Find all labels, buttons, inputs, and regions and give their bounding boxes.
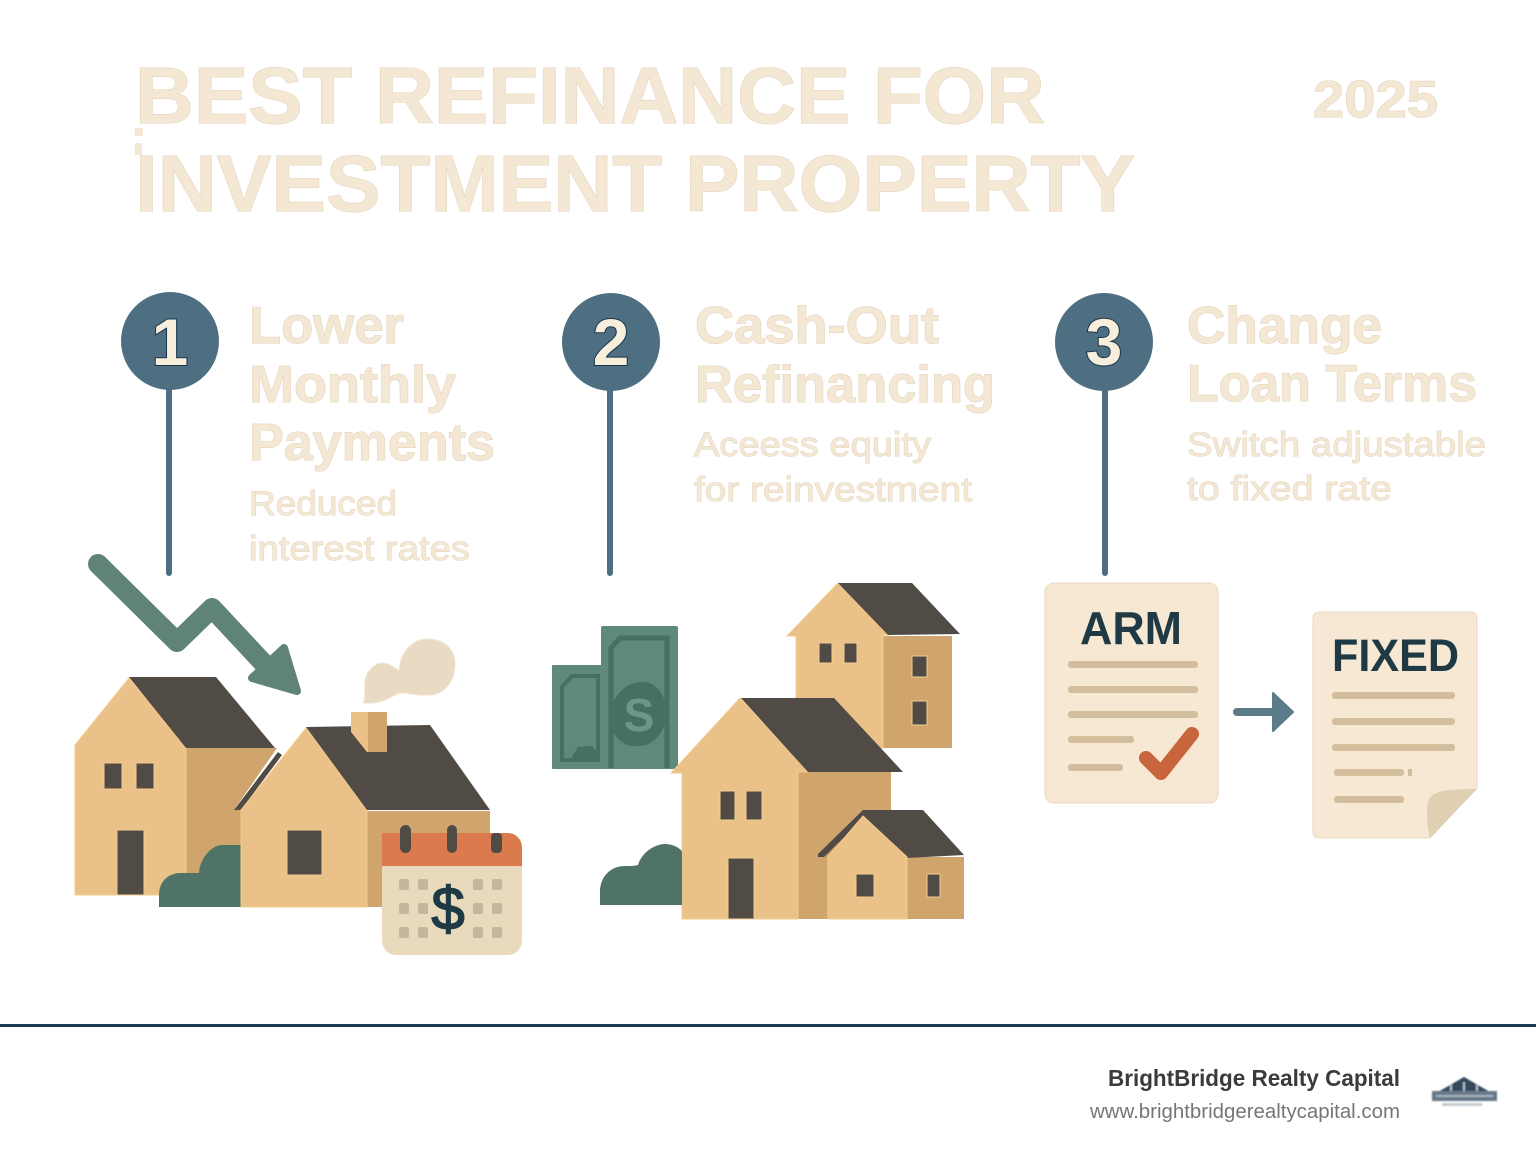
- title: BEST REFINANCE FOR: [135, 51, 1045, 140]
- step 2 description: for reinvestment: [694, 471, 973, 509]
- document: FIXED: FIXED: [1332, 630, 1459, 681]
- illustration: small house: [818, 810, 964, 919]
- step 2 description: [694, 426, 973, 509]
- footer: company name: BrightBridge Realty Capital: [1108, 1065, 1400, 1091]
- step 2 heading: Refinancing: [695, 356, 995, 414]
- icon: banknotes: [552, 626, 678, 769]
- footer: logo: [1432, 1077, 1497, 1106]
- arrow: ARM to fixed: [1233, 693, 1293, 731]
- step 1 marker: 1: [152, 305, 188, 379]
- step 3 marker: 3: [1086, 305, 1122, 379]
- icon: banknotes: S: [624, 689, 654, 741]
- step 1 heading: [249, 297, 495, 472]
- document: ARM: [1045, 583, 1218, 803]
- step 1 marker: [121, 292, 219, 576]
- step 1 heading: Monthly: [249, 356, 456, 414]
- step 1 description: interest rates: [249, 530, 470, 568]
- illustration: upper house: [787, 583, 960, 748]
- icon: calendar with dollar: $: [431, 875, 465, 942]
- title: [135, 51, 1135, 228]
- step 3 marker: [1055, 293, 1153, 576]
- icon: falling rate arrow: [98, 564, 297, 691]
- step 3 heading: Change: [1187, 297, 1382, 355]
- footer divider: [0, 1024, 1536, 1027]
- step 2 heading: Cash-Out: [695, 297, 939, 355]
- document: FIXED: [1313, 612, 1477, 838]
- illustration: two houses: [75, 677, 490, 907]
- title: INVESTMENT PROPERTY: [135, 139, 1135, 228]
- icon: chimney smoke: [363, 639, 455, 703]
- step 3 description: Switch adjustable: [1187, 426, 1486, 464]
- icon: bush: [600, 844, 682, 905]
- step 3 heading: Loan Terms: [1187, 355, 1477, 413]
- step 2 description: Aceess equity: [694, 426, 931, 464]
- step 1 heading: Lower: [249, 297, 404, 355]
- footer: website: www.brightbridgerealtycapital.com: [1089, 1101, 1400, 1123]
- step 2 marker: 2: [593, 305, 629, 379]
- icon: check mark: [1146, 734, 1192, 773]
- step 2 heading: [695, 297, 995, 414]
- icon: calendar with dollar: [382, 825, 522, 955]
- step 1 description: [249, 485, 470, 568]
- step 3 description: to fixed rate: [1187, 470, 1392, 508]
- step 1 description: Reduced: [249, 485, 397, 523]
- document: ARM: ARM: [1080, 602, 1182, 654]
- illustration: main house: [671, 698, 903, 919]
- step 1 heading: Payments: [249, 414, 495, 472]
- step 3 description: [1187, 426, 1486, 508]
- step 2 marker: [562, 293, 660, 576]
- step 3 heading: [1187, 297, 1477, 413]
- year label: 2025: [1313, 71, 1438, 129]
